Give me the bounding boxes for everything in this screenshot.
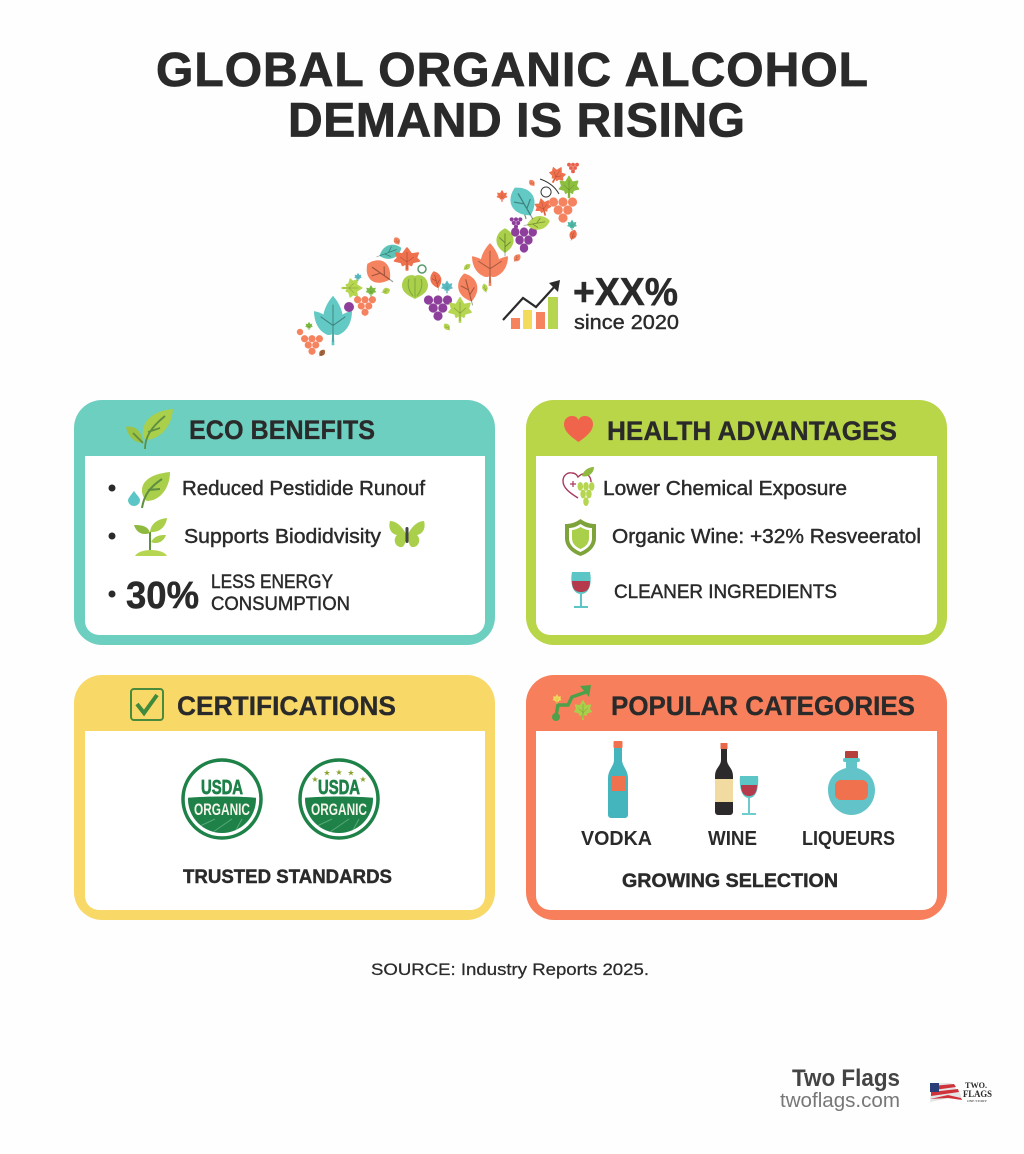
badge: usda organic with stars: ORGANIC: [311, 800, 367, 819]
leaf and grape rising arrow: [297, 163, 579, 358]
brand name: twoflags.com: [780, 1090, 900, 1112]
badge: usda organic: ORGANIC: [194, 800, 250, 819]
icon: wine bottle and glass: [715, 743, 758, 815]
text: LESS ENERGY: [211, 571, 333, 593]
icon: heart with grapes: [563, 467, 594, 506]
growth stat: +XX%: [573, 271, 678, 314]
heading: CERTIFICATIONS: [177, 691, 396, 721]
icon: liqueur flask: [828, 751, 875, 815]
brand name: Two Flags: [792, 1065, 900, 1092]
icon: sprout: [134, 518, 167, 556]
icon: heart: [564, 416, 593, 442]
label: WINE: [708, 828, 757, 850]
badge: usda organic with stars: ★: [335, 768, 343, 777]
heading: HEALTH ADVANTAGES: [607, 416, 897, 446]
text: Supports Biodidvisity: [184, 525, 382, 548]
icon: shield: [565, 519, 596, 556]
bullet: [108, 590, 116, 598]
icon: leaf and water drop: [128, 472, 170, 508]
heading: POPULAR CATEGORIES: [611, 691, 915, 721]
panel: popular categories: [526, 675, 947, 920]
label: VODKA: [581, 828, 652, 850]
badge: usda organic: USDA: [201, 777, 243, 799]
panel: health advantages: [526, 400, 947, 645]
logo: two flags: FLAGS: [963, 1089, 992, 1099]
icon: wine glass: [571, 572, 591, 607]
badge: usda organic with stars: ★: [359, 775, 367, 784]
brand name: [780, 1065, 900, 1112]
text: Lower Chemical Exposure: [603, 477, 847, 500]
caption: GROWING SELECTION: [622, 870, 838, 892]
label: LIQUEURS: [802, 828, 895, 850]
bullet: [108, 484, 116, 492]
caption: TRUSTED STANDARDS: [183, 866, 392, 888]
text: [211, 571, 350, 615]
badge: usda organic with stars: ★: [323, 768, 331, 778]
text: CONSUMPTION: [211, 593, 350, 615]
icon: growth vine: [552, 685, 591, 721]
logo: two flags: ONE STORY: [967, 1099, 987, 1103]
badge: usda organic with stars: USDA: [318, 777, 360, 799]
badge: usda organic with stars: [300, 760, 378, 838]
text: Organic Wine: +32% Resveeratol: [612, 525, 921, 548]
logo: two flags: [930, 1081, 992, 1103]
title: [156, 44, 868, 148]
panel: certifications: [74, 675, 495, 920]
badge: usda organic with stars: ★: [347, 768, 355, 778]
title: DEMAND IS RISING: [288, 94, 745, 148]
growth mini chart icon: [503, 280, 560, 329]
badge: usda organic with stars: ★: [311, 775, 319, 784]
growth stat: [573, 271, 679, 334]
text: Reduced Pestidide Runouf: [182, 477, 425, 500]
panel: eco benefits: [74, 400, 495, 645]
bullet: [108, 532, 116, 540]
source note: SOURCE: Industry Reports 2025.: [371, 960, 649, 979]
logo: two flags: TWO.: [965, 1081, 987, 1090]
heading: ECO BENEFITS: [189, 415, 375, 445]
growth stat: since 2020: [574, 311, 679, 334]
stat: 30%: [126, 575, 199, 617]
badge: usda organic: [183, 760, 261, 838]
icon: butterfly: [389, 521, 425, 547]
icon: vodka bottle: [608, 741, 628, 818]
text: CLEANER INGREDIENTS: [614, 581, 837, 603]
title: GLOBAL ORGANIC ALCOHOL: [156, 44, 868, 97]
icon: seedling leaves: [126, 409, 173, 449]
icon: checkbox: [131, 689, 163, 720]
